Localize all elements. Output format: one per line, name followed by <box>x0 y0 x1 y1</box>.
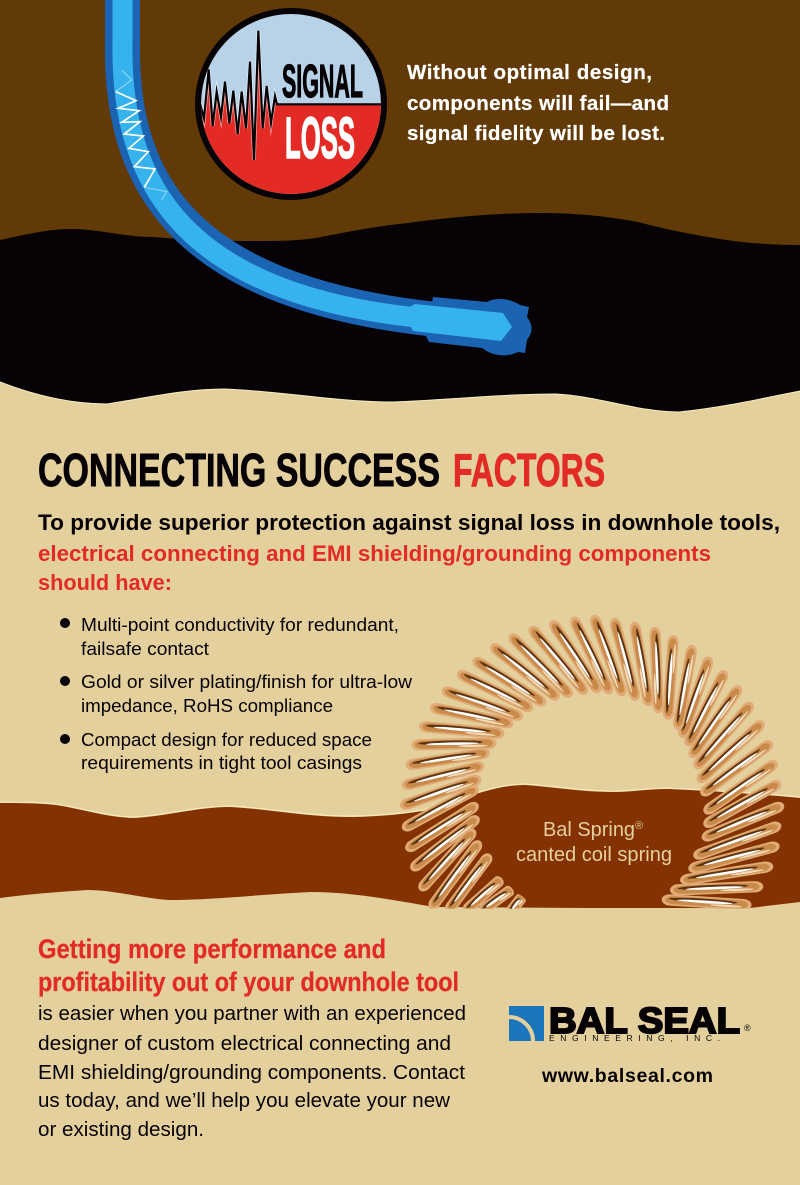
logo mark <box>509 1006 544 1041</box>
badge: signal loss: LOSS <box>285 106 355 171</box>
logo wordmark: BAL SEAL <box>549 1000 740 1041</box>
bullet 3: Compact design for reduced space <box>81 730 372 750</box>
red heading: more performance: Getting more performance and <box>38 934 386 964</box>
waveform <box>201 30 381 194</box>
subheading text: To provide superior protection against signal loss in downhole tools, <box>38 510 780 535</box>
red heading: more performance <box>38 934 459 997</box>
logo: bal seal <box>509 1006 750 1042</box>
body text: designer of custom electrical connecting and <box>38 1033 451 1055</box>
website url: www.balseal.com <box>541 1065 713 1087</box>
bullet 3 <box>60 730 372 773</box>
body text: EMI shielding/grounding components. Contact <box>38 1062 465 1084</box>
body text: or existing design. <box>38 1119 204 1141</box>
band: brown top layer <box>0 0 800 245</box>
badge: signal loss: SIGNAL <box>282 55 363 107</box>
heading: connecting success factors: FACTORS <box>453 444 605 496</box>
spring caption: canted coil spring <box>516 844 672 866</box>
bullet 2: impedance, RoHS compliance <box>81 696 333 716</box>
red heading: more performance: profitability out of your downhole tool <box>38 967 459 997</box>
spring caption: Bal Spring <box>543 819 635 841</box>
intro text <box>407 61 669 145</box>
bullet 1 <box>60 615 399 659</box>
spring: canted coil <box>398 613 786 916</box>
spring caption: ® <box>635 820 643 832</box>
bullet 2 <box>60 672 413 716</box>
subheading text: should have: <box>38 570 172 595</box>
band: black rock layer <box>0 200 800 412</box>
spring caption <box>516 819 672 866</box>
band: rust layer <box>0 785 800 908</box>
registered mark: ® <box>744 1023 751 1033</box>
logo tagline: ENGINEERING, INC. <box>549 1033 720 1043</box>
body text: us today, and we’ll help you elevate your new <box>38 1090 451 1112</box>
pipe: downhole tool <box>116 0 532 355</box>
heading: connecting success factors: CONNECTING SUCCESS <box>38 444 440 496</box>
intro text: components will fail—and <box>407 92 669 115</box>
subheading text: electrical connecting and EMI shielding/grounding components <box>38 541 711 566</box>
bullet 3: requirements in tight tool casings <box>81 753 362 773</box>
pipe outer wall <box>122 0 432 319</box>
pipe head <box>426 297 532 355</box>
pipe tip <box>411 304 512 341</box>
pale edge on sand boundary <box>0 382 800 412</box>
pipe inner channel <box>122 0 412 317</box>
body text <box>38 1003 466 1141</box>
zigzag signal spring <box>116 70 167 200</box>
bullet 1: Multi-point conductivity for redundant, <box>81 615 399 635</box>
intro text: Without optimal design, <box>407 61 652 84</box>
pale edge on rust layer <box>0 784 800 817</box>
bullet list <box>60 615 413 773</box>
body text: is easier when you partner with an experienced <box>38 1003 466 1025</box>
badge: signal loss <box>195 8 388 207</box>
badge ring <box>195 8 387 200</box>
intro text: signal fidelity will be lost. <box>407 122 665 145</box>
bullet 2: Gold or silver plating/finish for ultra-low <box>81 672 413 692</box>
bullet 1: failsafe contact <box>81 639 209 659</box>
subheading text <box>38 510 780 595</box>
badge fill <box>201 14 381 194</box>
